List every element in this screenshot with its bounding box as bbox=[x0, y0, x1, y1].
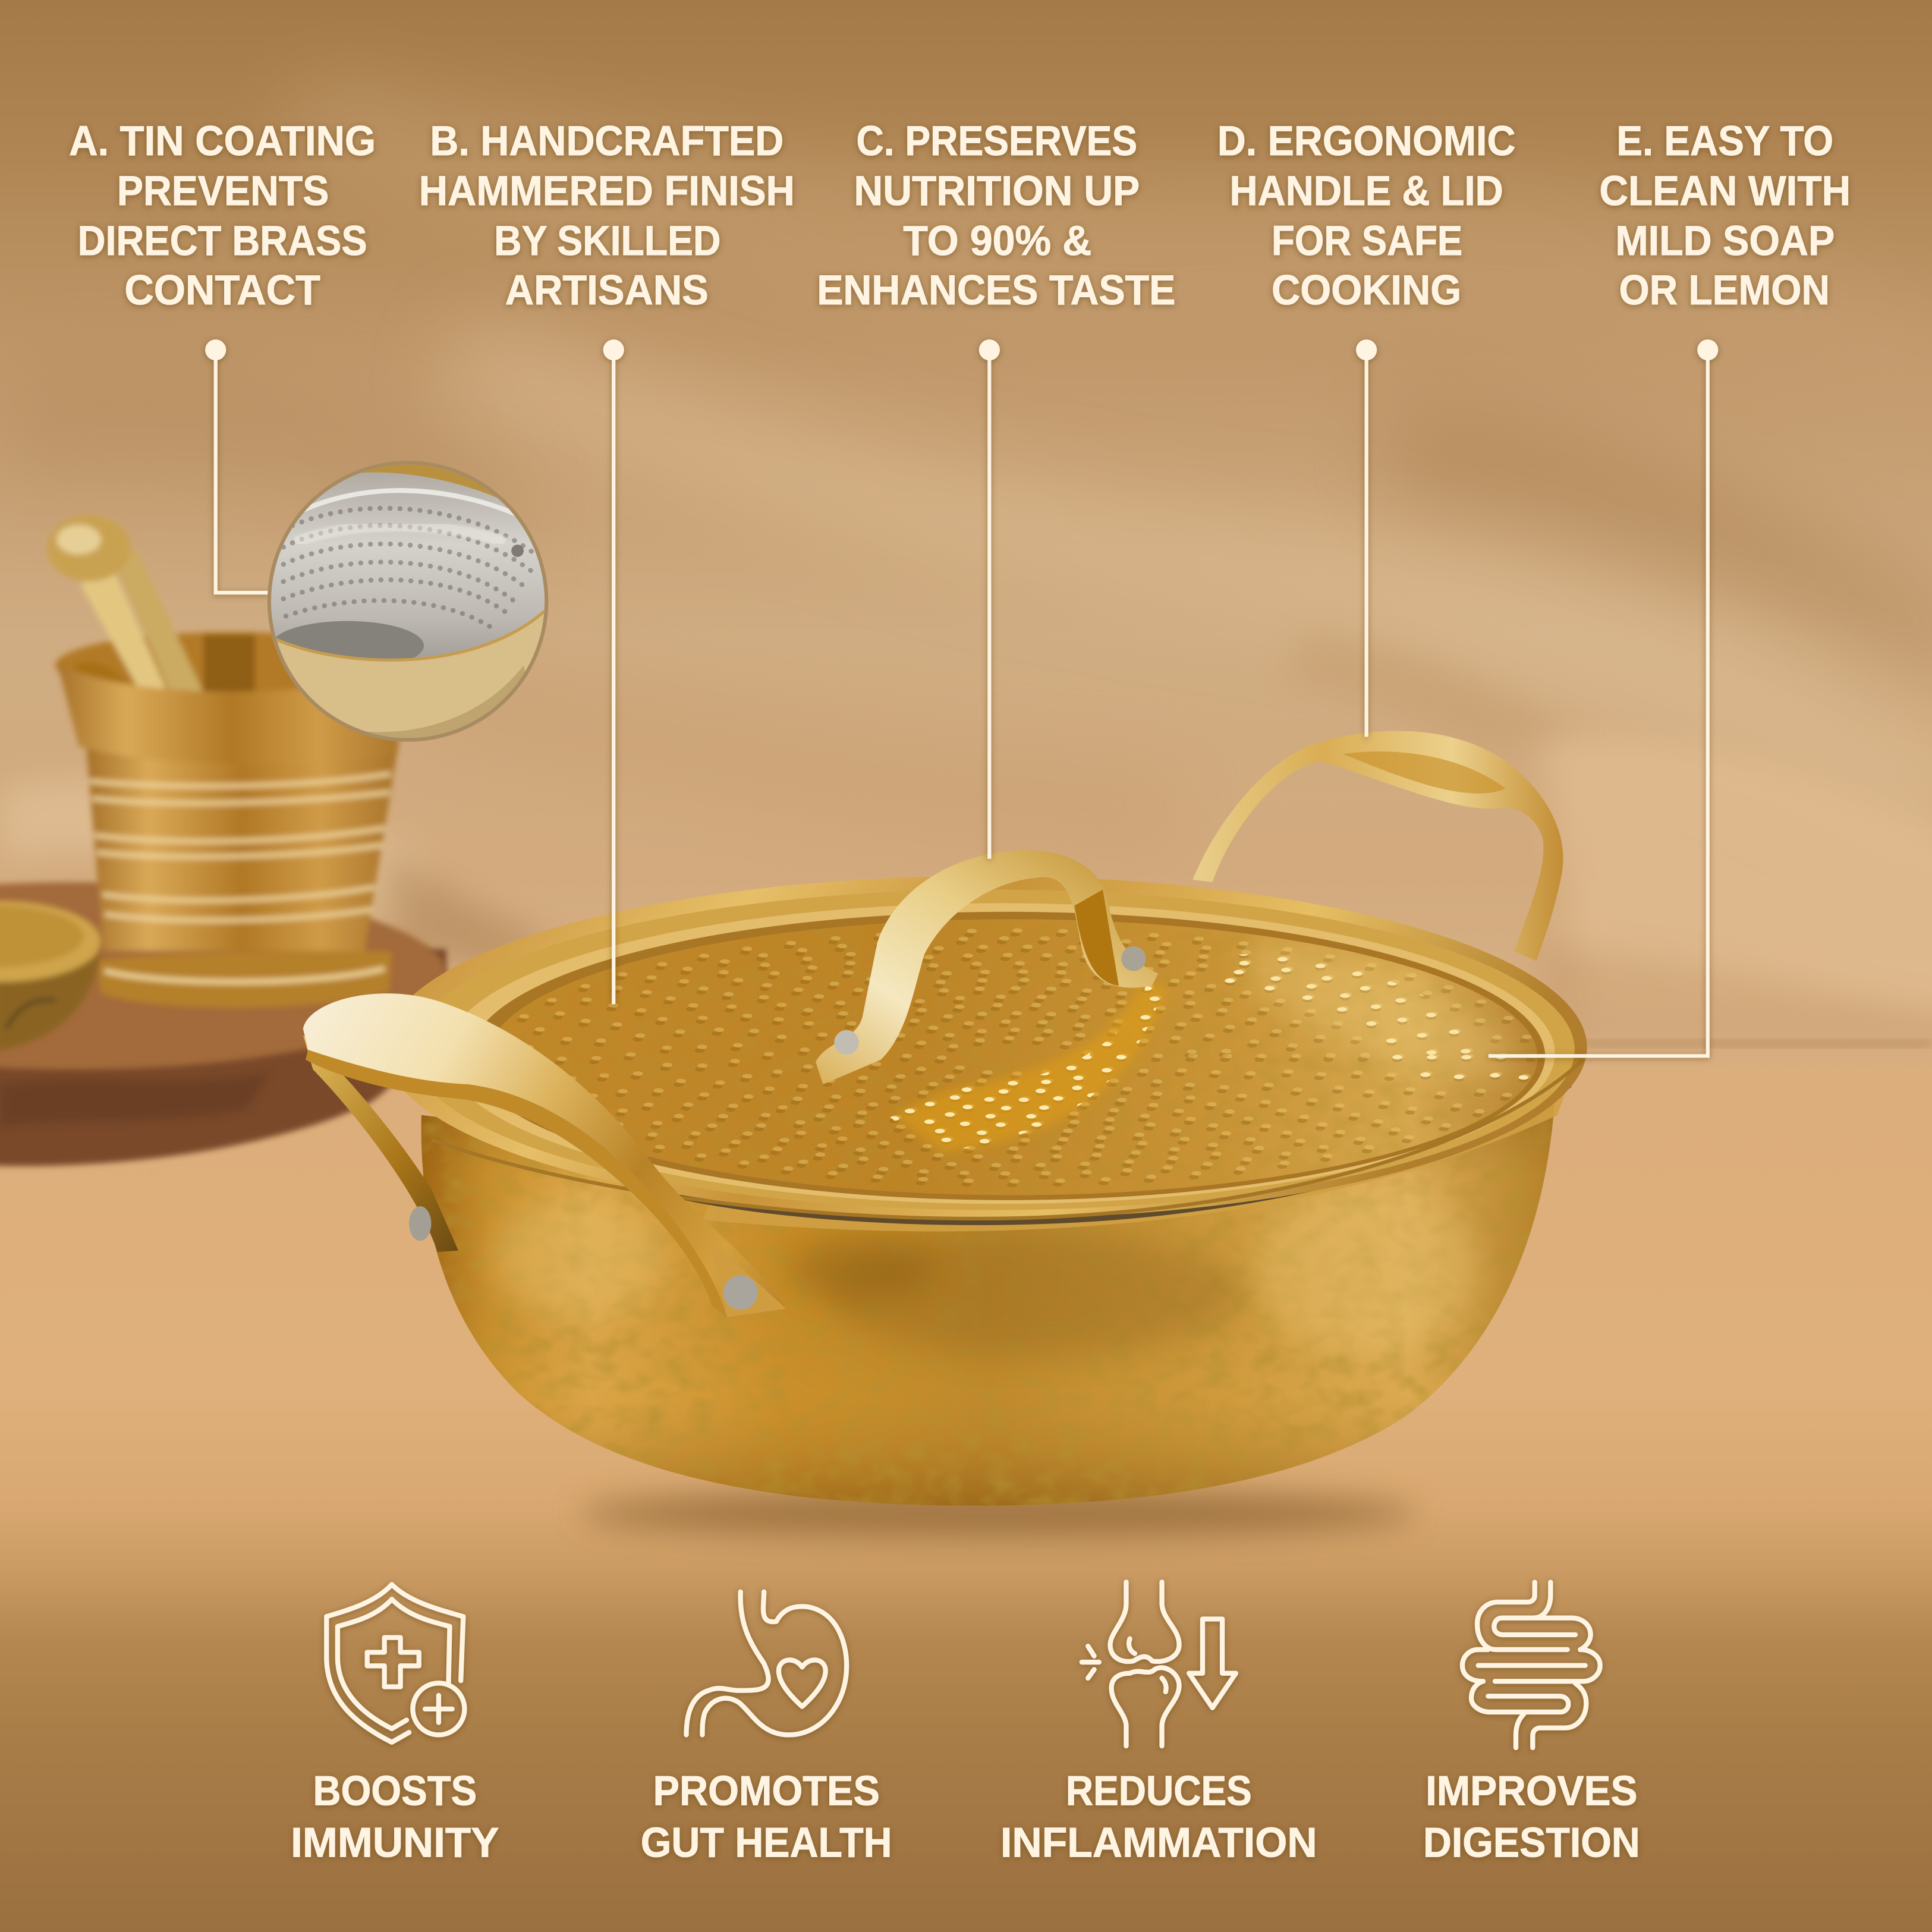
pan rim edge under lid bbox=[702, 1087, 1567, 1232]
label A: tin coating: PREVENTS bbox=[117, 167, 329, 214]
lid handle bbox=[816, 850, 1158, 1084]
benefit: reduces inflammation: REDUCES bbox=[1066, 1767, 1252, 1814]
label B: handcrafted finish bbox=[419, 117, 795, 313]
label B: handcrafted finish: ARTISANS bbox=[505, 266, 709, 313]
label A: tin coating: DIRECT BRASS bbox=[78, 217, 367, 264]
pestle bbox=[47, 515, 203, 693]
icon: intestines bbox=[1462, 1582, 1600, 1748]
benefit: promotes gut health: GUT HEALTH bbox=[641, 1819, 892, 1866]
benefit: boosts immunity bbox=[291, 1584, 499, 1866]
wooden tray bbox=[0, 882, 447, 1166]
callout lines and dots bbox=[205, 339, 1718, 1056]
label D: ergonomic handle bbox=[1217, 117, 1515, 313]
back handle bbox=[1192, 731, 1563, 961]
label A: tin coating: CONTACT bbox=[124, 266, 320, 313]
benefit: boosts immunity: BOOSTS bbox=[313, 1767, 477, 1814]
mortar body bbox=[86, 747, 398, 951]
benefit: reduces inflammation bbox=[1000, 1582, 1317, 1866]
lid hammered panel bbox=[480, 912, 1540, 1201]
mortar interior bbox=[55, 632, 408, 698]
icon: knee joint with down arrow bbox=[1082, 1582, 1236, 1746]
mortar and pestle bbox=[47, 515, 408, 1008]
label D: ergonomic handle: FOR SAFE bbox=[1272, 217, 1462, 264]
label B: handcrafted finish: HAMMERED FINISH bbox=[419, 167, 795, 214]
small brass bowl bbox=[0, 901, 101, 1051]
line A bbox=[205, 339, 269, 593]
label C: preserves nutrition: TO 90% & bbox=[903, 217, 1091, 264]
benefit: improves digestion: DIGESTION bbox=[1423, 1819, 1640, 1866]
inset detail: tin coating bbox=[265, 456, 550, 754]
label B: handcrafted finish: B. HANDCRAFTED bbox=[430, 117, 784, 164]
label C: preserves nutrition: C. PRESERVES bbox=[857, 117, 1137, 164]
label C: preserves nutrition: ENHANCES TASTE bbox=[817, 266, 1175, 313]
label D: ergonomic handle: HANDLE & LID bbox=[1230, 167, 1503, 214]
line E bbox=[1489, 339, 1718, 1056]
label A: tin coating: A. TIN COATING bbox=[69, 117, 376, 164]
benefit: improves digestion bbox=[1423, 1582, 1640, 1866]
label B: handcrafted finish: BY SKILLED bbox=[494, 217, 721, 264]
label D: ergonomic handle: D. ERGONOMIC bbox=[1217, 117, 1515, 164]
mortar base bbox=[96, 951, 392, 1008]
line D bbox=[1356, 339, 1377, 737]
benefits row bbox=[291, 1582, 1640, 1866]
benefit: promotes gut health: PROMOTES bbox=[653, 1767, 880, 1814]
brass kadai pan bbox=[303, 731, 1587, 1538]
line C bbox=[979, 339, 1000, 859]
lid lower edge highlight bbox=[431, 1060, 1583, 1219]
label A: tin coating bbox=[69, 117, 376, 313]
line B bbox=[603, 339, 624, 1004]
label E: easy to clean: E. EASY TO bbox=[1616, 117, 1833, 164]
label E: easy to clean: MILD SOAP bbox=[1615, 217, 1835, 264]
feature labels bbox=[69, 117, 1851, 313]
label D: ergonomic handle: COOKING bbox=[1272, 266, 1461, 313]
pan shadow bbox=[579, 1489, 1417, 1538]
label C: preserves nutrition: NUTRITION UP bbox=[854, 167, 1140, 214]
benefit: improves digestion: IMPROVES bbox=[1426, 1767, 1638, 1814]
label E: easy to clean bbox=[1599, 117, 1851, 313]
benefit: reduces inflammation: INFLAMMATION bbox=[1000, 1819, 1317, 1866]
icon: shield with plus bbox=[326, 1584, 464, 1742]
front left handle bbox=[303, 993, 786, 1317]
label C: preserves nutrition bbox=[817, 117, 1175, 313]
label E: easy to clean: CLEAN WITH bbox=[1599, 167, 1851, 214]
lid rim bbox=[385, 876, 1587, 1219]
pan body bbox=[407, 1084, 1565, 1509]
icon: stomach with heart bbox=[686, 1592, 847, 1735]
benefit: promotes gut health bbox=[641, 1592, 892, 1866]
label E: easy to clean: OR LEMON bbox=[1619, 266, 1830, 313]
benefit: boosts immunity: IMMUNITY bbox=[291, 1819, 499, 1866]
